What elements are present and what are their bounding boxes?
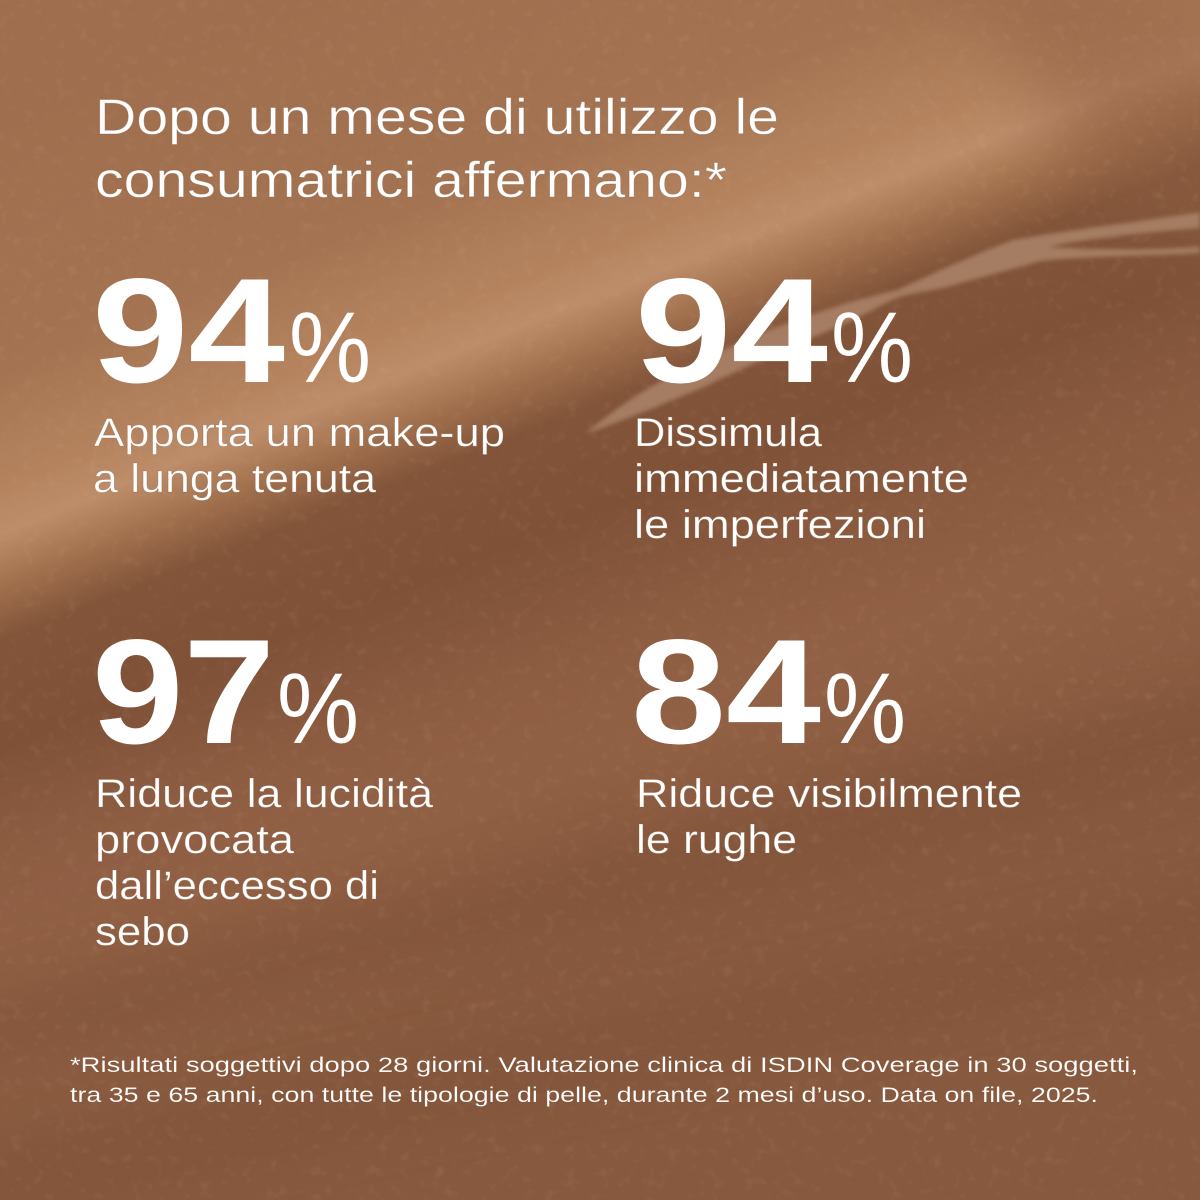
stat: 94% imperfezioni: immediatamente xyxy=(634,457,969,501)
stat: 94% imperfezioni: 94 xyxy=(635,247,828,414)
stat: 94% make-up: % xyxy=(289,292,371,404)
stat: 97% lucidità xyxy=(92,608,434,954)
stat: 97% lucidità: sebo xyxy=(95,910,190,954)
stat: 94% make-up: a lunga tenuta xyxy=(93,457,377,501)
stat: 84% rughe: % xyxy=(824,653,906,765)
stat: 97% lucidità: provocata xyxy=(95,818,295,862)
footnote: *Risultati soggettivi dopo 28 giorni. Valutazione clinica di ISDIN Coverage in 30 soggetti, xyxy=(70,1054,1138,1077)
stat: 94% make-up: Apporta un make-up xyxy=(94,411,505,455)
stat: 94% imperfezioni: Dissimula xyxy=(634,411,823,455)
title xyxy=(95,89,779,208)
footnote: tra 35 e 65 anni, con tutte le tipologie di pelle, durante 2 mesi d’uso. Data on file, 2025. xyxy=(70,1084,1098,1107)
stat: 84% rughe xyxy=(631,608,1022,862)
title: consumatrici affermano:* xyxy=(95,152,727,208)
footnote xyxy=(70,1054,1138,1107)
stat: 97% lucidità: dall’eccesso di xyxy=(95,864,379,908)
stat: 94% imperfezioni: le imperfezioni xyxy=(634,503,926,547)
stat: 94% make-up xyxy=(92,247,505,501)
stat: 97% lucidità: Riduce la lucidità xyxy=(95,772,434,816)
stat: 84% rughe: Riduce visibilmente xyxy=(636,772,1022,816)
title: Dopo un mese di utilizzo le xyxy=(95,89,779,145)
stat: 84% rughe: le rughe xyxy=(636,818,797,862)
stat: 94% make-up: 94 xyxy=(92,247,285,414)
stat: 97% lucidità: 97 xyxy=(92,608,275,775)
stat: 97% lucidità: % xyxy=(277,653,359,765)
stat: 94% imperfezioni xyxy=(634,247,969,547)
stat: 94% imperfezioni: % xyxy=(831,292,913,404)
decorative streak: light wisp xyxy=(585,212,1200,434)
stat: 84% rughe: 84 xyxy=(631,608,821,775)
